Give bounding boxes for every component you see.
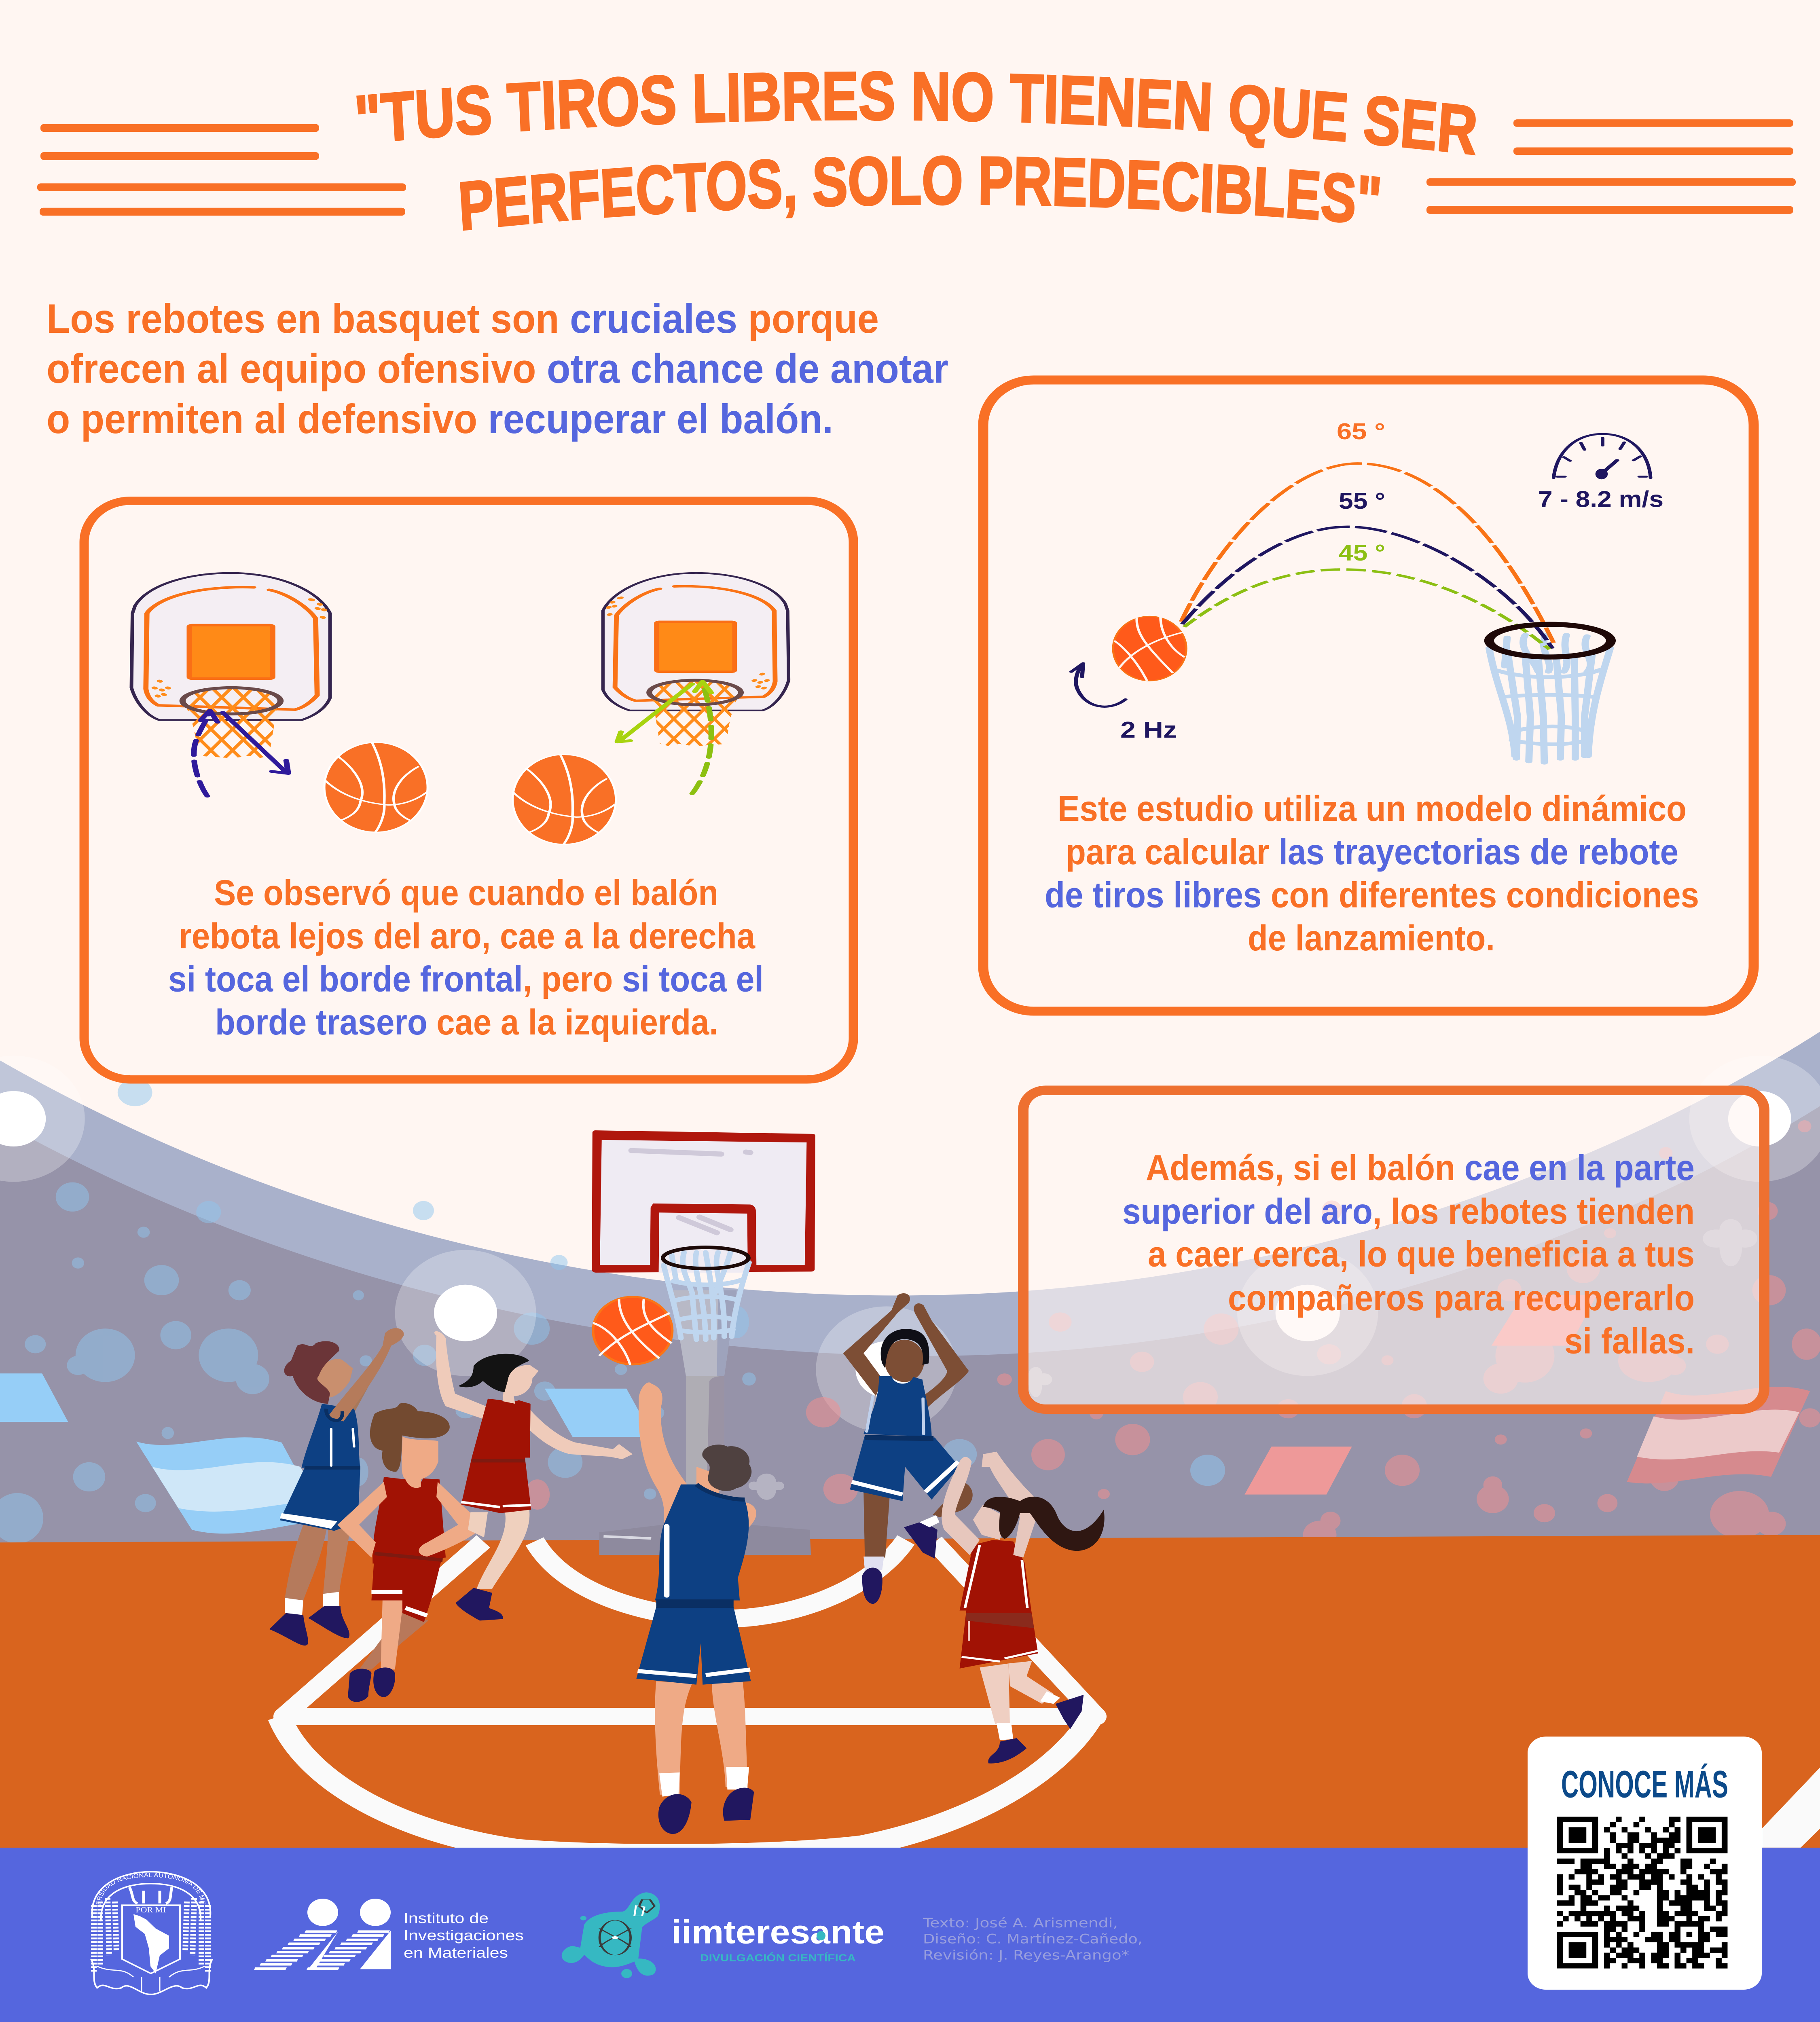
logo: Instituto de Investigaciones en Materiales: Investigaciones [404,1927,524,1944]
intro paragraph: Los rebotes en basquet son cruciales porque [47,296,879,342]
panel text [168,873,764,1043]
player: red with long ponytail [904,1452,1105,1764]
credits: Revisión: J. Reyes-Arango* [923,1948,1129,1963]
panel text [1045,789,1699,958]
panel text: a caer cerca, lo que beneficia a tus [1148,1234,1695,1274]
court lines [279,1540,1097,1855]
net [1489,635,1610,763]
intro paragraph: ofrecen al equipo ofensivo otra chance de anotar [47,346,948,392]
panel text: si toca el borde frontal, pero si toca el [168,959,764,999]
panel text: superior del aro, los rebotes tienden [1122,1191,1695,1232]
title: PERFECTOS, SOLO PREDECIBLES" [456,143,1384,245]
court corner line [1762,1768,1820,1848]
panel text [1122,1148,1695,1361]
player: red with wavy hair [337,1403,483,1702]
post [672,1290,736,1527]
illustration: hoops, arrows and balls [131,573,789,845]
player: blue left [269,1328,404,1646]
QR card [1528,1736,1762,1990]
arrows: front rim [194,711,288,796]
backboard [592,1130,815,1273]
panel text: de tiros libres con diferentes condiciones [1045,875,1699,915]
logo: iimteresante: DIVULGACIÓN CIENTÍFICA [700,1952,856,1963]
rim [663,1247,748,1269]
title: "TUS TIROS LIBRES NO TIENEN QUE SER [353,58,1480,169]
panel text: compañeros para recuperarlo [1228,1278,1695,1318]
logo: iimteresante [562,1892,885,1978]
panel: rebound direction [84,501,853,1079]
post base [599,1525,811,1555]
logo: iimteresante: iimteresante [671,1914,885,1950]
panel text: Además, si el balón cae en la parte [1146,1148,1695,1188]
footer [0,1848,1820,2022]
logo: UNAM crest: POR MI [135,1905,166,1914]
logo: Instituto de Investigaciones en Materiales: Instituto de [404,1910,489,1927]
angle and speed labels: 65 ° [1337,419,1385,444]
crowd: left side lights and blue bubbles [0,1056,977,1544]
court floor [0,1535,1820,1849]
intro paragraph: o permiten al defensivo recuperar el balón. [47,396,833,442]
ball [1113,616,1186,681]
ball 1 [324,742,427,833]
top title bars right [1426,119,1796,214]
panel: upper rim note [1023,1090,1764,1409]
angle and speed labels: 7 - 8.2 m/s [1538,486,1663,512]
angle and speed labels: 2 Hz [1120,717,1177,742]
player: blue jumper [843,1293,969,1604]
net [664,1252,749,1340]
player: red with black ponytail [434,1331,633,1620]
panel text: si fallas. [1564,1321,1695,1361]
crowd: right side red bubbles [997,1056,1820,1549]
game ball [593,1297,672,1365]
credits: Diseño: C. Martínez-Cañedo, [923,1931,1143,1947]
panel text: borde trasero cae a la izquierda. [215,1002,718,1043]
QR code [1557,1819,1727,1966]
logo: Instituto de Investigaciones en Materiales: en Materiales [404,1945,508,1961]
intro paragraph [47,296,948,442]
credits [923,1916,1143,1963]
stadium stands [0,1032,1820,1582]
angle and speed labels: 55 ° [1339,488,1385,514]
spin arrow [1071,663,1126,706]
credits: Texto: José A. Arismendi, [923,1916,1118,1931]
panel text: de lanzamiento. [1248,918,1495,958]
trajectories [1181,463,1553,649]
top title bars left [37,124,406,216]
gauge icon [1553,434,1651,479]
panel text: Se observó que cuando el balón [214,873,718,913]
angle and speed labels [1120,419,1663,742]
arrows: back rim [618,681,711,793]
flags [0,1373,1810,1533]
rim [1489,624,1611,657]
panel text: para calcular las trayectorias de rebote [1066,832,1678,872]
panel text: rebota lejos del aro, cae a la derecha [179,916,756,956]
angle and speed labels: 45 ° [1339,539,1385,565]
backboard right [603,573,789,746]
trajectory illustration [1071,434,1651,763]
logo: UNAM crest: UNIVERSIDAD NACIONAL AUTONOMA DE MEXICO [0,0,207,1905]
logo: Instituto de Investigaciones en Materiales [254,1899,524,1970]
hoop on post [269,1130,969,1834]
backboard left [131,573,330,758]
panel text: Este estudio utiliza un modelo dinámico [1058,789,1687,829]
panel: dynamic model [983,380,1754,1011]
ball 2 [513,755,616,845]
player: shooter in blue [636,1382,756,1834]
title [353,58,1480,245]
